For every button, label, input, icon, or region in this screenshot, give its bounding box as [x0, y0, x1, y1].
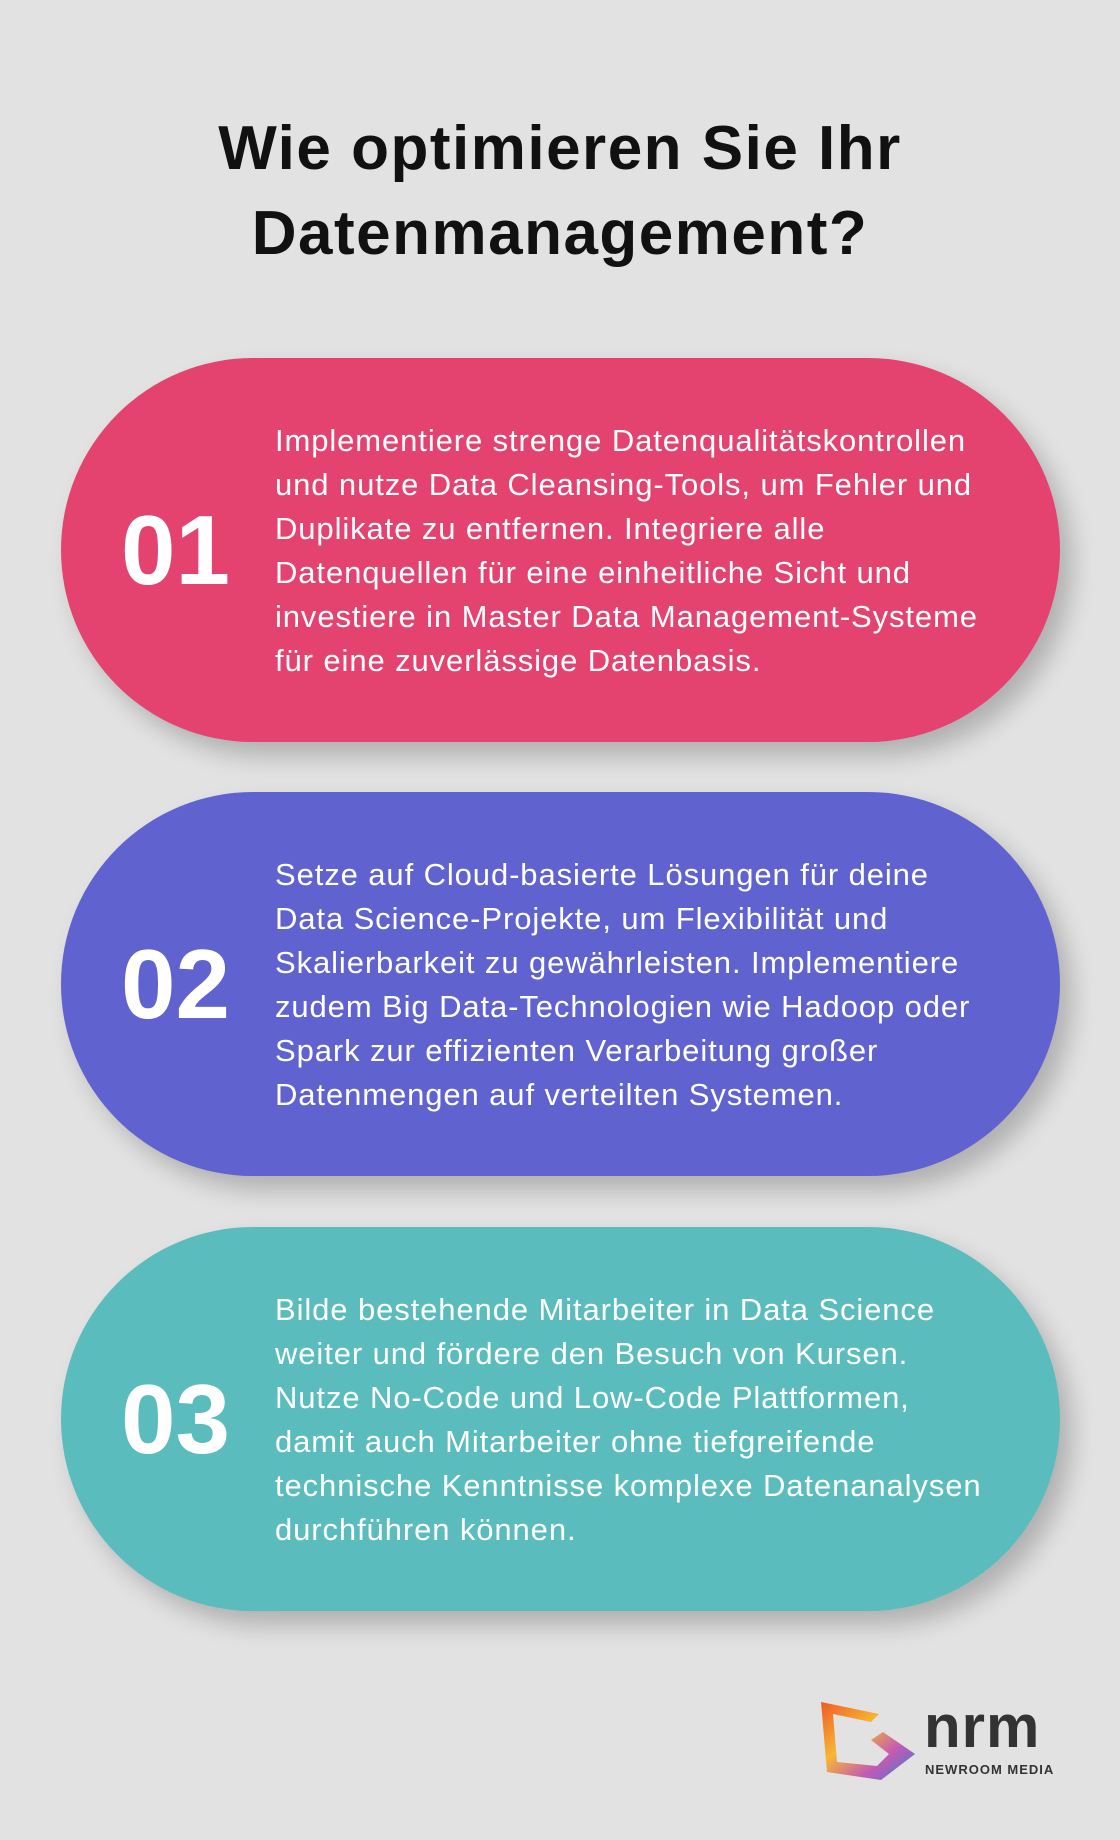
text 02: Skalierbarkeit zu gewährleisten. Implementiere — [275, 945, 959, 980]
panel: step 02 — [61, 792, 1060, 1176]
text 01: Duplikate zu entfernen. Integriere alle — [275, 511, 825, 546]
number 01: 01 — [121, 495, 230, 605]
text 01: investiere in Master Data Management-Systeme — [275, 599, 978, 634]
text 02: Spark zur effizienten Verarbeitung großer — [275, 1033, 878, 1068]
logo: NEWROOM MEDIA — [925, 1762, 1054, 1777]
text 01: Implementiere strenge Datenqualitätskontrollen — [275, 423, 966, 458]
text 01: für eine zuverlässige Datenbasis. — [275, 643, 761, 678]
text 02: zudem Big Data-Technologien wie Hadoop oder — [275, 989, 970, 1024]
logo text: nrm — [924, 1693, 1040, 1760]
panel: step 01 — [61, 358, 1060, 742]
text 03: Nutze No-Code und Low-Code Plattformen, — [275, 1380, 910, 1415]
title: Wie optimieren Sie Ihr — [218, 114, 902, 183]
number 03: 03 — [121, 1364, 230, 1474]
text 01 — [275, 423, 978, 678]
icon: logo mark — [821, 1702, 915, 1780]
text 02: Data Science-Projekte, um Flexibilität und — [275, 901, 888, 936]
text 02 — [275, 857, 970, 1112]
text 02: Setze auf Cloud-basierte Lösungen für deine — [275, 857, 929, 892]
text 03 — [275, 1292, 982, 1547]
text 03: weiter und fördere den Besuch von Kursen. — [275, 1336, 908, 1371]
text 03: Bilde bestehende Mitarbeiter in Data Science — [275, 1292, 935, 1327]
title — [218, 114, 902, 268]
text 03: technische Kenntnisse komplexe Datenanalysen — [275, 1468, 982, 1503]
text 02: Datenmengen auf verteilten Systemen. — [275, 1077, 843, 1112]
text 01: Datenquellen für eine einheitliche Sicht und — [275, 555, 911, 590]
number 02: 02 — [121, 929, 230, 1039]
text 03: durchführen können. — [275, 1512, 576, 1547]
text 01: und nutze Data Cleansing-Tools, um Fehler und — [275, 467, 972, 502]
title: Datenmanagement? — [252, 199, 868, 268]
panel: step 03 — [61, 1227, 1060, 1611]
text 03: damit auch Mitarbeiter ohne tiefgreifende — [275, 1424, 875, 1459]
logo — [821, 1693, 1054, 1780]
